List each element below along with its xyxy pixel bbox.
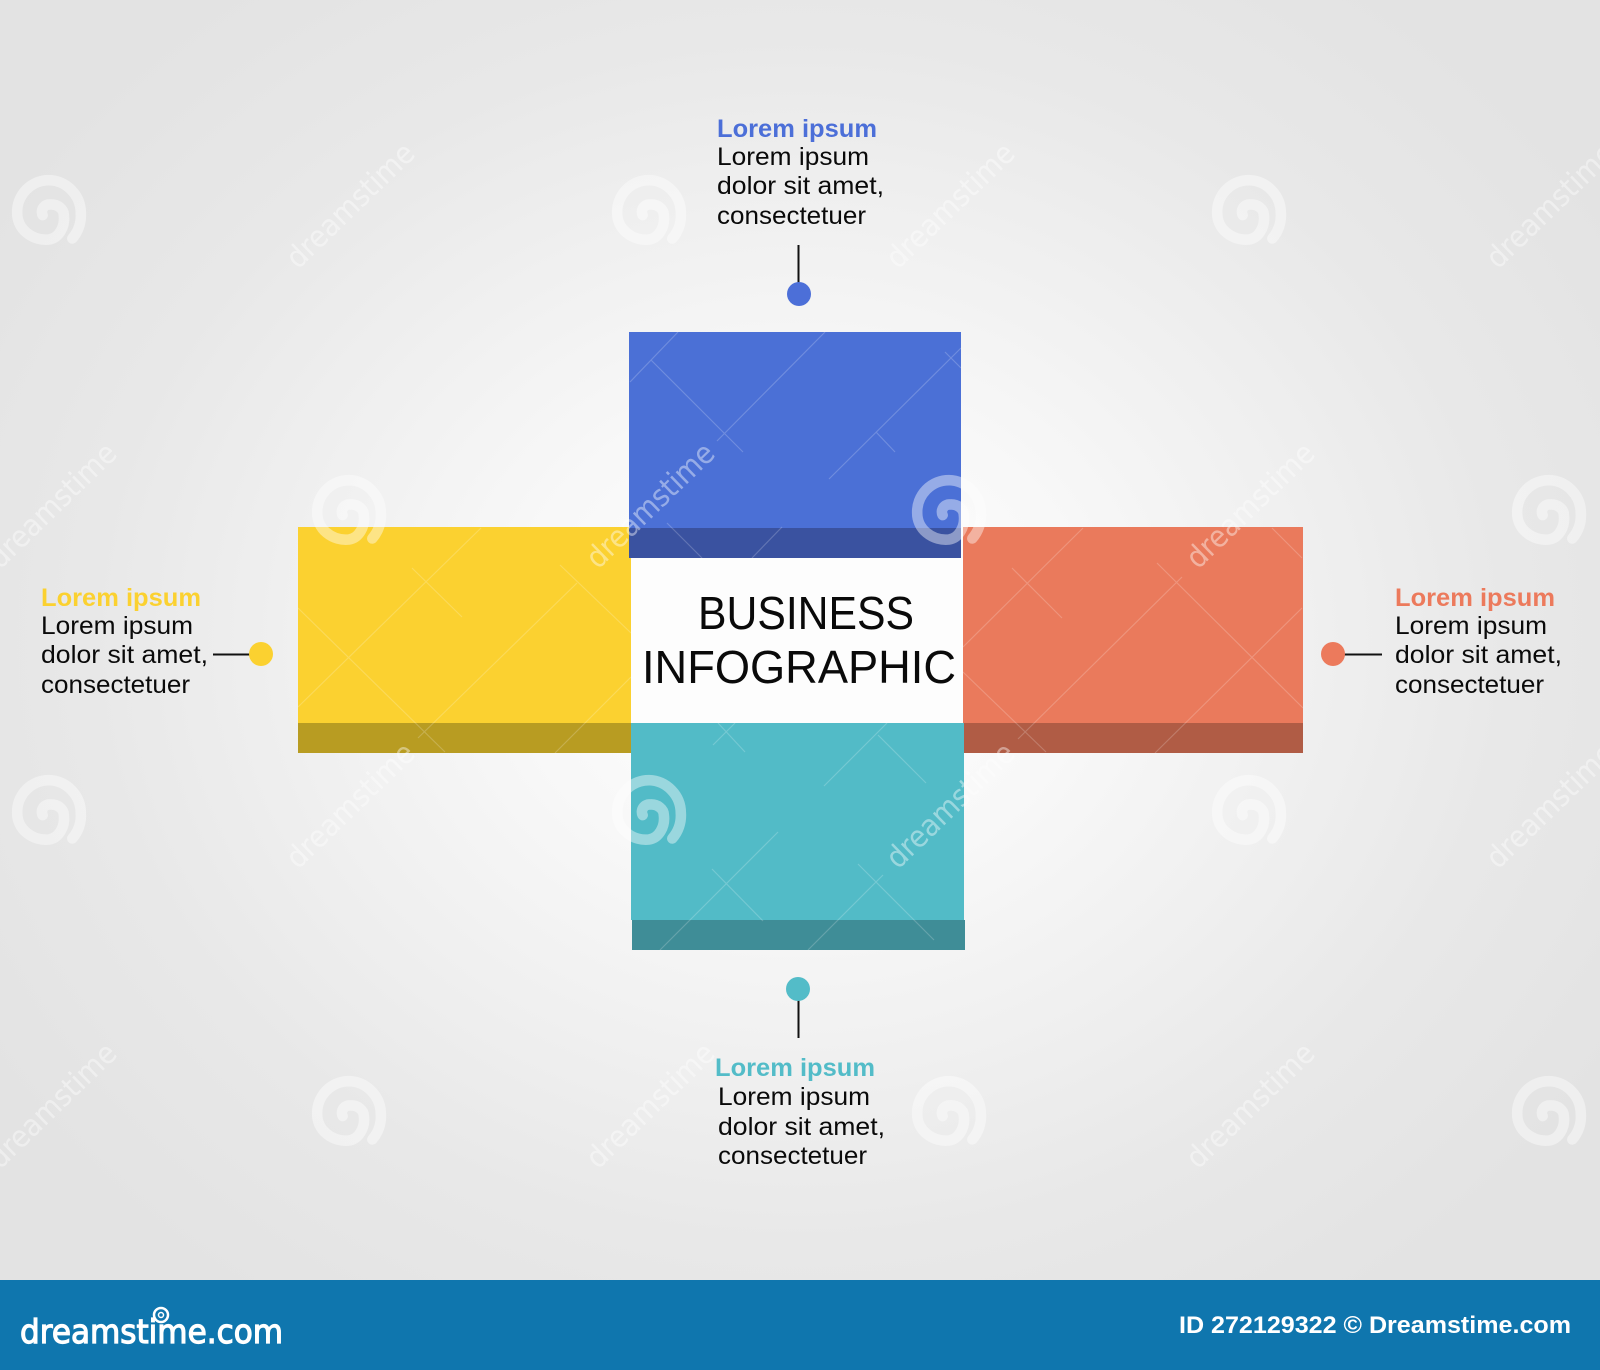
- panel: teal bar: [631, 723, 965, 950]
- watermark: dreamstime: [1179, 1036, 1322, 1176]
- text block: right: Lorem ipsum: [1395, 584, 1555, 612]
- text block: bottom: Lorem ipsum: [715, 1054, 875, 1082]
- text block: top: Lorem ipsum: [717, 143, 869, 171]
- connector: bottom: [786, 977, 810, 1038]
- text block: left: [41, 584, 208, 699]
- text block: bottom: [715, 1054, 885, 1170]
- text block: left: dolor sit amet,: [41, 641, 208, 669]
- panel: yellow bar: [298, 527, 632, 753]
- text block: bottom: consectetuer: [718, 1142, 867, 1170]
- text block: right: Lorem ipsum: [1395, 612, 1547, 640]
- text block: bottom: dolor sit amet,: [718, 1113, 885, 1141]
- logo: dreamstime: dreamstime.com: [20, 1312, 283, 1351]
- image id credit: ID 272129322 © Dreamstime.com: [1179, 1312, 1571, 1339]
- panel: blue bar: [629, 332, 961, 558]
- title: [642, 587, 956, 693]
- watermark: dreamstime: [1179, 436, 1322, 576]
- text block: left: Lorem ipsum: [41, 584, 201, 612]
- panel: center box: [631, 558, 963, 723]
- watermark: dreamstime: [279, 736, 422, 876]
- title: BUSINESS: [698, 587, 914, 639]
- panel: red bar: [963, 527, 1303, 753]
- connector: right: [1321, 642, 1382, 666]
- text block: top: consectetuer: [717, 202, 866, 230]
- footer banner: [0, 1280, 1600, 1370]
- watermark: dreamstime: [879, 736, 1022, 876]
- text block: bottom: Lorem ipsum: [718, 1083, 870, 1111]
- watermark: [0, 136, 1600, 1176]
- watermark: dreamstime: [279, 136, 422, 276]
- text block: right: consectetuer: [1395, 671, 1544, 699]
- text block: top: Lorem ipsum: [717, 115, 877, 143]
- text block: top: [717, 115, 884, 230]
- watermark: dreamstime: [879, 136, 1022, 276]
- watermark: dreamstime: [579, 1036, 722, 1176]
- title: INFOGRAPHIC: [642, 641, 956, 693]
- text block: left: consectetuer: [41, 671, 190, 699]
- text block: top: dolor sit amet,: [717, 172, 884, 200]
- text block: right: [1395, 584, 1562, 699]
- connector: left: [213, 642, 273, 666]
- text block: right: dolor sit amet,: [1395, 641, 1562, 669]
- watermark: dreamstime: [579, 436, 722, 576]
- text block: left: Lorem ipsum: [41, 612, 193, 640]
- connector: top: [787, 245, 811, 306]
